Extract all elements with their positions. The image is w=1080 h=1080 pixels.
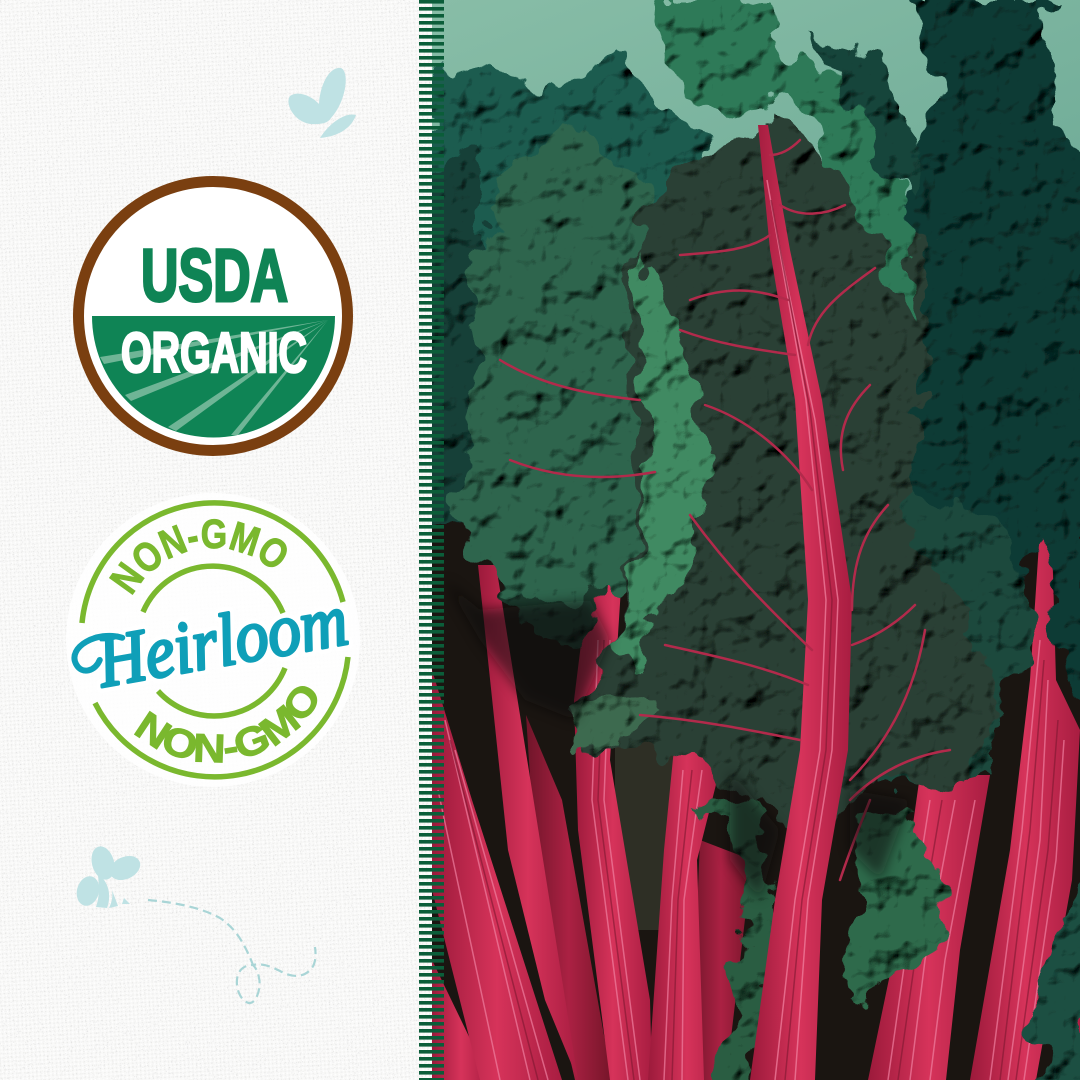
badge: USDA Organic	[78, 182, 348, 450]
badge word: NON-GMO bottom: NON-GMO	[134, 686, 318, 763]
bee	[73, 844, 144, 908]
striped border	[419, 0, 444, 1080]
back left leaves	[425, 55, 712, 650]
flight path	[148, 900, 316, 1003]
badge word: NON-GMO top: NON-GMO	[109, 518, 287, 595]
badge word: Heirloom: Heirloom	[90, 579, 354, 704]
icon: butterfly	[288, 68, 356, 138]
top curled leaf	[652, 0, 920, 330]
photo backdrop	[432, 0, 1080, 196]
leaf veins	[500, 140, 950, 880]
photo: rainbow chard	[425, 0, 1080, 1080]
dark right leaf	[902, 0, 1080, 1080]
main stalk	[750, 125, 852, 1080]
field rays	[100, 320, 328, 435]
icon: bee with dashed flight path	[73, 844, 316, 1003]
central leaf	[565, 115, 1000, 835]
badge rings	[82, 503, 348, 777]
badge white backing	[66, 493, 360, 787]
right lower leaf	[878, 490, 1038, 794]
badge: Non-GMO Heirloom	[66, 493, 360, 787]
fabric background	[0, 0, 432, 1080]
badge word: Heirloom: Heirloom	[90, 579, 354, 704]
stalk ribs	[438, 640, 1064, 1080]
back stalks	[432, 528, 1080, 1080]
leaf ruffle edge	[568, 250, 712, 745]
main left leaf	[450, 120, 670, 610]
badge ring	[78, 182, 348, 450]
shadow under leaves	[478, 595, 910, 900]
lower leaves	[690, 790, 945, 1080]
badge word: ORGANIC: ORGANIC	[121, 321, 307, 385]
badge word: USDA: USDA	[141, 234, 288, 317]
badge green field	[92, 316, 335, 438]
